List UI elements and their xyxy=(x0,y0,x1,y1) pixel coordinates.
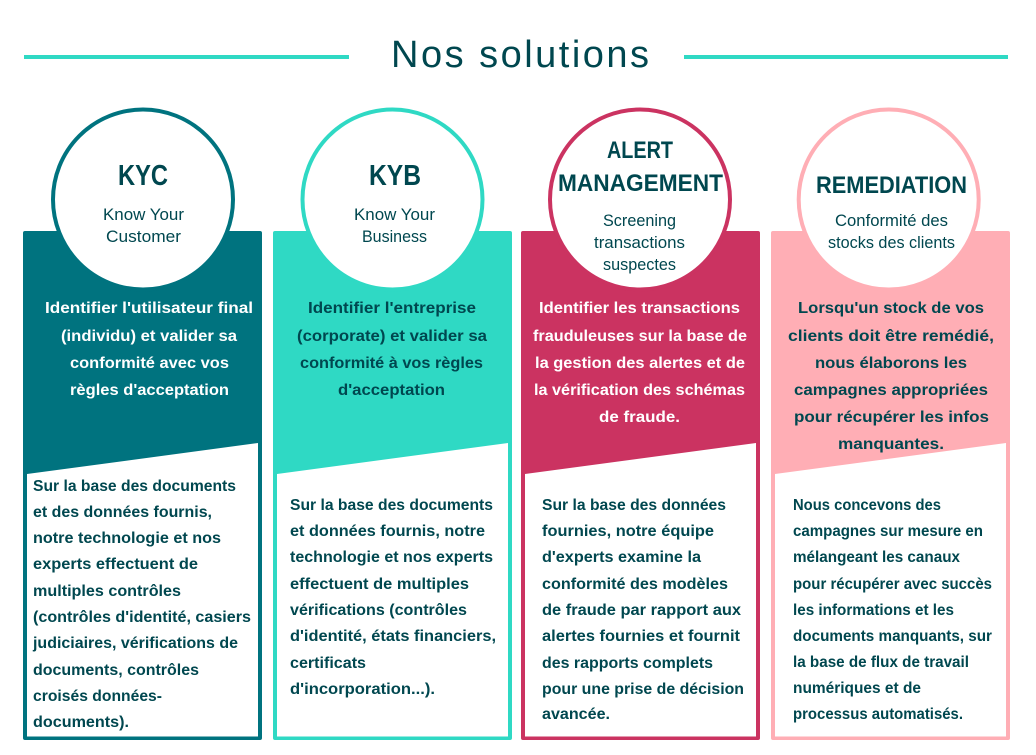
details KYB: Sur la base des documents xyxy=(290,497,493,514)
summary Alert Management: Identifier les transactions xyxy=(539,300,740,317)
summary KYB: (corporate) et valider sa xyxy=(297,328,487,345)
panel background Alert Management xyxy=(521,231,760,740)
panel: KYC xyxy=(23,110,262,740)
summary Alert Management: la gestion des alertes et de xyxy=(535,355,745,372)
summary KYC: (individu) et valider sa xyxy=(61,328,237,345)
circle KYB xyxy=(302,110,482,290)
details Alert Management xyxy=(542,497,744,723)
panel background Remediation xyxy=(771,231,1010,740)
subtitle KYC: Customer xyxy=(106,228,182,246)
details Remediation: campagnes sur mesure en xyxy=(793,523,983,540)
details Remediation: documents manquants, sur xyxy=(793,628,992,645)
circle KYC xyxy=(53,110,233,290)
subtitle KYC xyxy=(103,206,185,246)
subtitle Remediation: stocks des clients xyxy=(828,234,955,252)
details Remediation xyxy=(793,497,992,723)
details Alert Management: d'experts examine la xyxy=(542,549,701,566)
details Alert Management: pour une prise de décision xyxy=(542,681,744,698)
panel: Alert Management xyxy=(521,110,760,740)
summary Alert Management: frauduleuses sur la base de xyxy=(533,328,747,345)
summary KYC xyxy=(45,300,253,399)
summary KYB: Identifier l'entreprise xyxy=(308,300,476,317)
details KYB: vérifications (contrôles xyxy=(290,602,467,619)
details KYC xyxy=(32,478,251,731)
summary KYB: d'acceptation xyxy=(338,382,445,399)
details KYC: (contrôles d'identité, casiers xyxy=(33,609,251,626)
details Remediation: processus automatisés. xyxy=(793,706,963,723)
heading Alert Management xyxy=(558,137,723,197)
details KYB xyxy=(290,497,496,698)
summary KYC: règles d'acceptation xyxy=(70,382,229,399)
subtitle Remediation: Conformité des xyxy=(835,212,948,230)
details KYC: judiciaires, vérifications de xyxy=(32,635,238,652)
details Alert Management: conformité des modèles xyxy=(542,576,728,593)
details Remediation: la base de flux de travail xyxy=(793,654,969,671)
summary Alert Management: de fraude. xyxy=(599,409,680,426)
details KYB: et données fournis, notre xyxy=(290,523,485,540)
title xyxy=(24,34,1008,76)
details KYB: d'incorporation...). xyxy=(290,681,435,698)
details KYC: croisés données- xyxy=(33,688,162,705)
summary KYC: conformité avec vos xyxy=(70,355,229,372)
subtitle Alert Management xyxy=(594,212,685,274)
subtitle Remediation xyxy=(828,212,955,252)
details Remediation: numériques et de xyxy=(793,680,921,697)
heading KYC: KYC xyxy=(118,160,168,192)
subtitle Alert Management: Screening xyxy=(603,212,676,230)
summary KYB: conformité à vos règles xyxy=(300,355,483,372)
summary Remediation: pour récupérer les infos xyxy=(794,409,989,426)
summary Remediation: clients doit être remédié, xyxy=(788,328,994,345)
panel background KYC xyxy=(23,231,262,740)
details Alert Management: de fraude par rapport aux xyxy=(542,602,741,619)
subtitle Alert Management: suspectes xyxy=(603,256,676,274)
details KYB: d'identité, états financiers, xyxy=(290,628,496,645)
details Remediation: pour récupérer avec succès xyxy=(793,576,992,593)
details KYB: certificats xyxy=(290,655,366,672)
summary Remediation xyxy=(788,300,994,453)
details KYB: technologie et nos experts xyxy=(290,549,493,566)
subtitle KYC: Know Your xyxy=(103,206,185,224)
details Alert Management: Sur la base des données xyxy=(542,497,726,514)
summary Remediation: nous élaborons les xyxy=(815,355,967,372)
panel: KYB xyxy=(273,110,512,740)
details Remediation: Nous concevons des xyxy=(793,497,941,514)
subtitle KYB: Business xyxy=(362,228,427,246)
subtitle KYB xyxy=(354,206,436,246)
details Remediation: mélangeant les canaux xyxy=(793,549,960,566)
summary KYB xyxy=(297,300,487,399)
heading Alert Management: MANAGEMENT xyxy=(558,170,723,197)
summary Alert Management: la vérification des schémas xyxy=(534,382,745,399)
details Alert Management: alertes fournies et fournit xyxy=(542,628,740,645)
circle Remediation xyxy=(799,110,979,290)
summary Alert Management xyxy=(533,300,747,426)
heading Alert Management: ALERT xyxy=(607,137,673,164)
panel: Remediation xyxy=(771,110,1010,740)
details KYC: notre technologie et nos xyxy=(33,530,221,547)
subtitle KYB: Know Your xyxy=(354,206,436,224)
heading Remediation: REMEDIATION xyxy=(816,172,967,199)
details KYC: et des données fournis, xyxy=(33,504,212,521)
details KYB: effectuent de multiples xyxy=(290,576,469,593)
heading KYB: KYB xyxy=(369,160,421,192)
title: Nos solutions xyxy=(391,34,649,76)
summary Remediation: Lorsqu'un stock de vos xyxy=(798,300,984,317)
details KYC: documents, contrôles xyxy=(33,662,199,679)
details Alert Management: fournies, notre équipe xyxy=(542,523,714,540)
details KYC: experts effectuent de xyxy=(33,556,198,573)
summary Remediation: manquantes. xyxy=(838,436,944,453)
summary KYC: Identifier l'utilisateur final xyxy=(45,300,253,317)
circle Alert Management xyxy=(550,110,730,290)
details Remediation: les informations et les xyxy=(793,602,954,619)
details Alert Management: des rapports complets xyxy=(542,655,713,672)
details KYC: Sur la base des documents xyxy=(33,478,236,495)
details KYC: documents). xyxy=(33,714,129,731)
details KYC: multiples contrôles xyxy=(33,583,181,600)
subtitle Alert Management: transactions xyxy=(594,234,685,252)
panel background KYB xyxy=(273,231,512,740)
details Alert Management: avancée. xyxy=(542,706,610,723)
summary Remediation: campagnes appropriées xyxy=(794,382,988,399)
